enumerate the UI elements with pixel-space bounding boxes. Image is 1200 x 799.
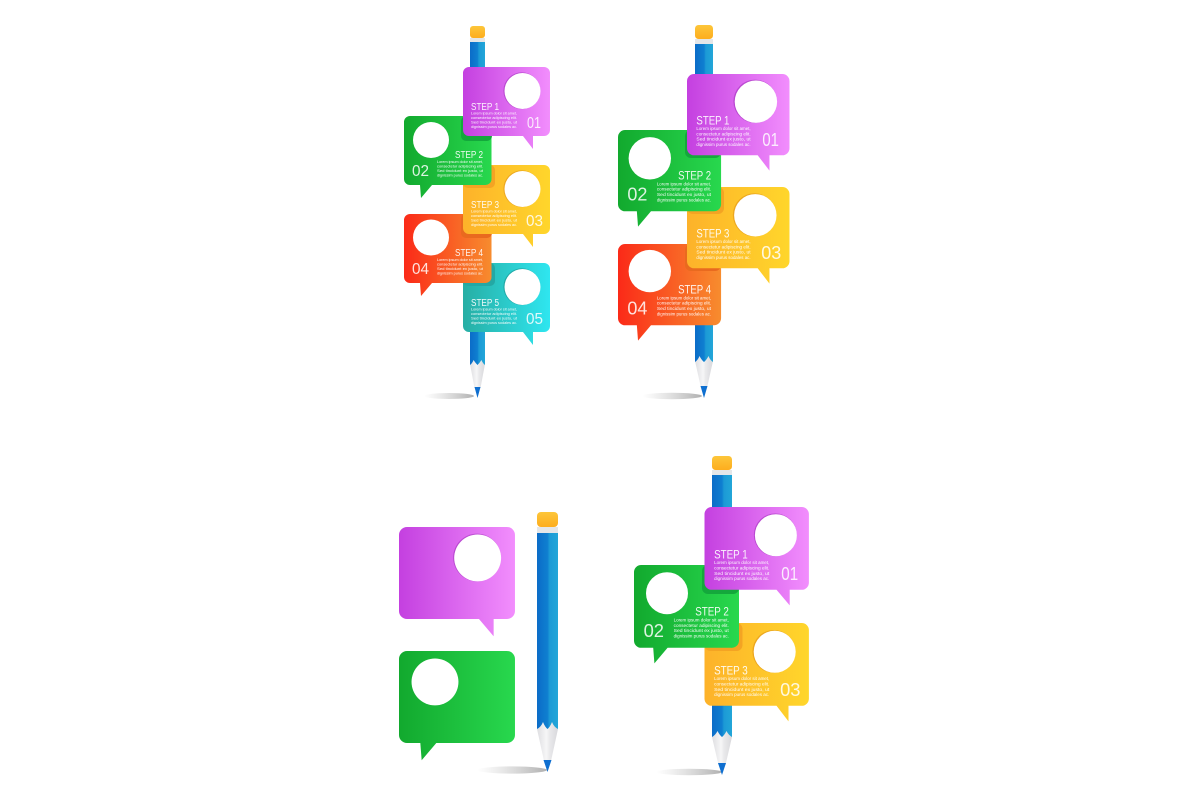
blank green card	[399, 651, 515, 760]
step 2 card: dignissim purus sodales ac.	[437, 174, 483, 178]
step 5 card: consectetur adipiscing elit.	[471, 312, 517, 316]
step 3 card: Lorem ipsum dolor sit amet,	[714, 676, 769, 681]
pencil: three-step layout	[656, 456, 732, 775]
panel: four-step layout	[618, 74, 789, 341]
panel: five-step layout	[404, 67, 550, 345]
step 2 card: consectetur adipiscing elit.	[674, 623, 729, 628]
step 5 card: STEP 5	[471, 298, 499, 309]
step 4 card: Lorem ipsum dolor sit amet,	[437, 258, 483, 262]
step 1 card: consectetur adipiscing elit.	[471, 116, 517, 120]
step 4 card: dignissim purus sodales ac.	[657, 311, 711, 316]
step 3 card: STEP 3	[696, 229, 729, 241]
step 1 card: STEP 1	[714, 549, 748, 562]
step 3 card	[687, 187, 789, 284]
step 2 card: Sed tincidunt ex justo, ut	[657, 192, 712, 197]
pencil: five-step layout	[424, 26, 485, 399]
step 5 card: 05	[526, 311, 543, 328]
step 3 card: dignissim purus sodales ac.	[696, 255, 751, 260]
step 5 card: Sed tincidunt ex justo, ut	[471, 316, 517, 320]
step 3 card: STEP 3	[714, 665, 748, 678]
step 3 card: Lorem ipsum dolor sit amet,	[696, 239, 751, 244]
step 4 card: 04	[412, 261, 429, 278]
step 1 card: Lorem ipsum dolor sit amet,	[696, 126, 751, 131]
step 2 card: STEP 2	[695, 605, 729, 618]
step 3 card: 03	[780, 679, 801, 700]
step 1 card: Lorem ipsum dolor sit amet,	[471, 112, 517, 116]
step 2 card: Sed tincidunt ex justo, ut	[437, 169, 483, 173]
step 1 card	[704, 507, 809, 605]
step 5 card: Lorem ipsum dolor sit amet,	[471, 308, 517, 312]
blank purple card	[399, 527, 515, 636]
step 3 card: Lorem ipsum dolor sit amet,	[471, 210, 517, 214]
step 3 card: consectetur adipiscing elit.	[696, 244, 751, 249]
step 4 card	[404, 214, 492, 296]
step 1 card	[463, 67, 550, 149]
step 1 card: Lorem ipsum dolor sit amet,	[714, 560, 769, 565]
step 4 card: Sed tincidunt ex justo, ut	[657, 306, 712, 311]
step 4 card: Lorem ipsum dolor sit amet,	[657, 295, 711, 300]
step 2 card: consectetur adipiscing elit.	[657, 187, 711, 192]
panel: blank template cards	[399, 527, 515, 760]
step 2 card: 02	[627, 184, 647, 205]
step 2 card: Lorem ipsum dolor sit amet,	[674, 617, 729, 622]
step 2 card: Lorem ipsum dolor sit amet,	[657, 181, 711, 186]
step 1 card: 01	[527, 115, 541, 132]
step 1 card: consectetur adipiscing elit.	[696, 131, 751, 136]
step 3 card: 03	[526, 213, 543, 230]
step 1 card: dignissim purus sodales ac.	[696, 142, 751, 147]
step 2 card: 02	[644, 620, 664, 641]
step 3 card: Sed tincidunt ex justo, ut	[714, 687, 770, 692]
step 1 card: Sed tincidunt ex justo, ut	[714, 571, 770, 576]
step 1 card: STEP 1	[696, 116, 729, 128]
step 3 card: STEP 3	[471, 200, 499, 211]
step 2 card: consectetur adipiscing elit.	[437, 164, 483, 168]
step 2 card	[634, 565, 739, 663]
step 4 card: STEP 4	[455, 248, 483, 259]
step 5 card	[463, 263, 550, 345]
step 1 card: STEP 1	[471, 102, 499, 113]
step 1 card: 01	[762, 129, 779, 150]
step 3 card: Sed tincidunt ex justo, ut	[696, 250, 752, 255]
step 4 card: dignissim purus sodales ac.	[437, 272, 483, 276]
step 4 card: 04	[627, 298, 647, 319]
step 3 card	[704, 623, 809, 721]
pencil: four-step layout	[642, 25, 713, 399]
step 1 card: consectetur adipiscing elit.	[714, 565, 769, 570]
step 1 card: dignissim purus sodales ac.	[714, 576, 769, 581]
step 3 card: 03	[761, 242, 781, 263]
panel: three-step layout	[634, 507, 809, 721]
step 3 card: consectetur adipiscing elit.	[471, 214, 517, 218]
step 3 card	[463, 165, 550, 247]
step 3 card: Sed tincidunt ex justo, ut	[471, 218, 517, 222]
step 4 card: consectetur adipiscing elit.	[657, 301, 711, 306]
step 2 card: dignissim purus sodales ac.	[657, 197, 711, 202]
step 2 card	[404, 116, 492, 198]
step 1 card: dignissim purus sodales ac.	[471, 125, 517, 129]
step 3 card: dignissim purus sodales ac.	[471, 223, 517, 227]
step 1 card: 01	[781, 563, 798, 584]
pencil: blank layout	[477, 512, 558, 774]
step 1 card	[687, 74, 789, 171]
step 1 card: Sed tincidunt ex justo, ut	[696, 137, 752, 142]
step 2 card: dignissim purus sodales ac.	[674, 634, 729, 639]
step 2 card: Lorem ipsum dolor sit amet,	[437, 160, 483, 164]
step 4 card: Sed tincidunt ex justo, ut	[437, 267, 483, 271]
step 2 card: STEP 2	[678, 170, 711, 182]
step 4 card: STEP 4	[678, 284, 712, 296]
step 3 card: consectetur adipiscing elit.	[714, 681, 769, 686]
step 2 card	[618, 130, 721, 227]
step 4 card	[618, 244, 721, 341]
step 1 card: Sed tincidunt ex justo, ut	[471, 120, 517, 124]
step 2 card: Sed tincidunt ex justo, ut	[674, 628, 730, 633]
step 5 card: dignissim purus sodales ac.	[471, 321, 517, 325]
step 2 card: 02	[412, 163, 429, 180]
step 2 card: STEP 2	[455, 150, 483, 161]
step 4 card: consectetur adipiscing elit.	[437, 262, 483, 266]
step 3 card: dignissim purus sodales ac.	[714, 692, 769, 697]
